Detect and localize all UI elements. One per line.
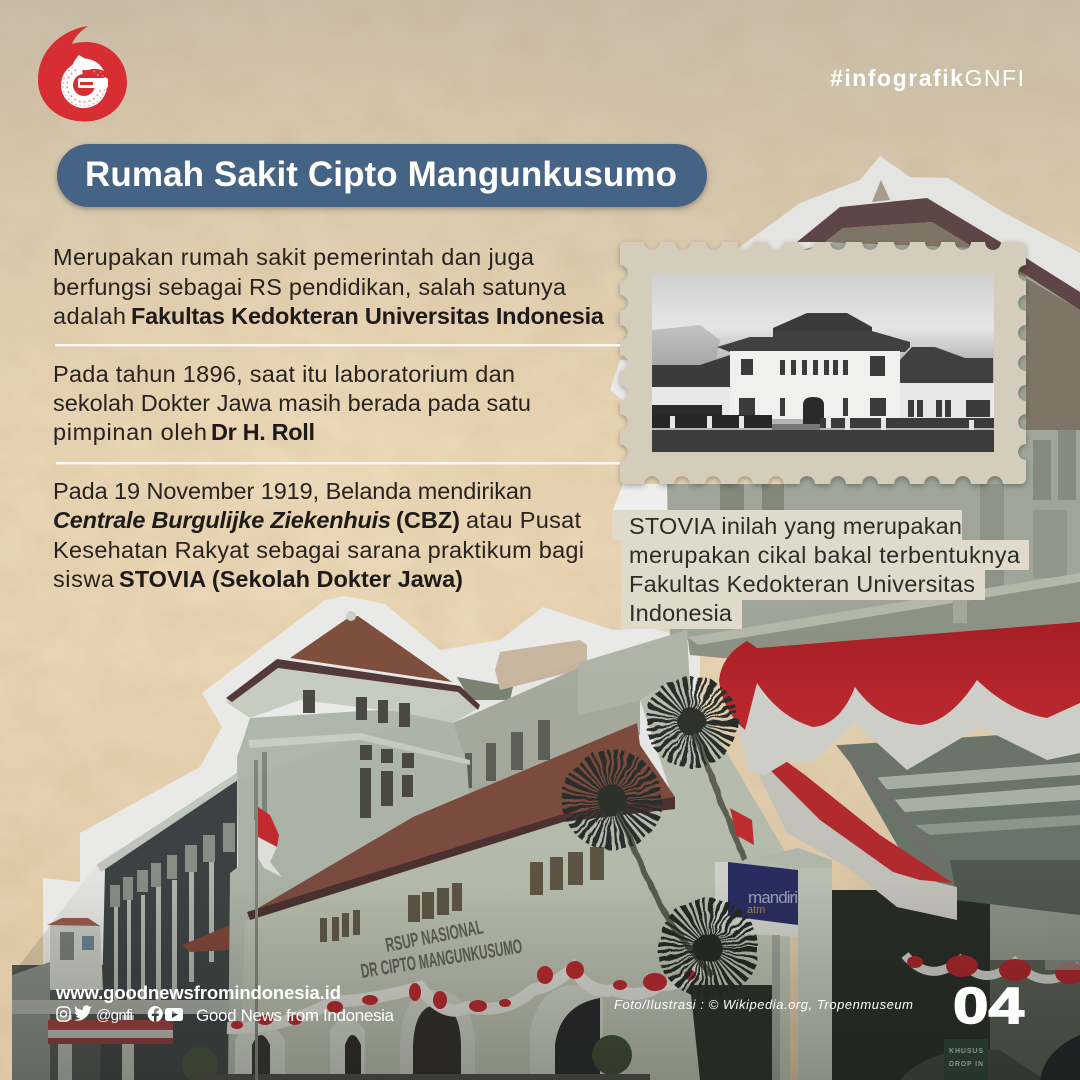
upper right building behind stamp — [667, 180, 1080, 640]
handle: @gnfi — [96, 1007, 133, 1024]
photo credit: Foto/Ilustrasi : © Wikipedia.org, Tropenmuseum — [614, 997, 913, 1012]
paragraph 2: Pada tahun 1896, saat itu laboratorium dan — [53, 361, 515, 387]
icon: instagram — [57, 1007, 70, 1021]
logo: red GNFI swirl — [38, 26, 127, 122]
title pill: Rumah Sakit Cipto Mangunkusumo — [85, 155, 677, 194]
paragraph 3: Pada 19 November 1919, Belanda mendirikan — [53, 478, 532, 504]
flag on pole — [255, 798, 282, 1080]
paragraph 3 — [53, 478, 584, 592]
icon: twitter — [74, 1005, 92, 1021]
caption with highlighted lines: Indonesia — [629, 600, 733, 626]
historic black and white photo — [652, 274, 994, 452]
bottom shading over photo — [12, 570, 1080, 1080]
palm tree centre — [587, 775, 712, 975]
paragraph 1: berfungsi sebagai RS pendidikan, salah satunya — [53, 274, 567, 300]
palm tree lower — [683, 923, 733, 973]
hashtag: #infografikGNFI — [830, 65, 1024, 91]
wing windows — [320, 847, 604, 942]
paragraph 2: sekolah Dokter Jawa masih berada pada satu — [53, 390, 531, 416]
drop-in sign — [944, 1039, 988, 1080]
top bunting, white swag — [735, 678, 1080, 775]
drop-in sign: DROP IN — [949, 1061, 983, 1068]
paragraph 3: Kesehatan Rakyat sebagai sarana praktikum bagi — [53, 537, 584, 563]
main wing tiled roof — [247, 723, 675, 920]
building sign: RSUP Nasional Dr Cipto Mangunkusumo — [359, 916, 524, 983]
paragraph 1: Fakultas Kedokteran Universitas Indonesia — [131, 303, 605, 329]
dark planting at base of palm — [592, 935, 780, 1080]
small red flag on palm — [730, 808, 754, 845]
ATM sign — [715, 862, 798, 937]
footer website: www.goodnewsfromindonesia.id — [55, 982, 341, 1003]
stamp paper — [620, 242, 1026, 484]
right garland — [905, 955, 1080, 984]
icon: facebook — [148, 1006, 163, 1022]
paragraph 3: atau Pusat — [466, 507, 581, 533]
torn white paper behind lower building — [43, 596, 700, 1080]
caption with highlighted lines — [612, 510, 1029, 629]
diagonal bunting, white — [745, 730, 957, 920]
left dark modern building — [12, 773, 238, 1080]
building sign: RSUP Nasional Dr Cipto Mangunkusumo: RSUP NASIONAL — [384, 916, 485, 957]
building sign: RSUP Nasional Dr Cipto Mangunkusumo: DR CIPTO MANGUNKUSUMO — [359, 936, 524, 983]
paragraph 3: STOVIA (Sekolah Dokter Jawa) — [119, 566, 463, 592]
page number: 04 — [953, 977, 1025, 1034]
ATM sign: mandiri — [748, 888, 798, 907]
channel name: Good News from Indonesia — [196, 1006, 395, 1025]
canopy underside with beams — [836, 730, 1080, 970]
torn white paper behind upper right building — [740, 156, 1080, 330]
canopy roof band — [688, 573, 1080, 660]
garland on main wall — [227, 961, 700, 1029]
paragraph 1: Merupakan rumah sakit pemerintah dan juga — [53, 244, 535, 270]
main wing wall — [240, 683, 790, 1080]
paragraph 3: siswa — [53, 566, 115, 592]
paragraph 2: pimpinan oleh — [53, 419, 207, 445]
paragraph 3: (CBZ) — [396, 507, 460, 533]
lower right wall and dark planting — [800, 890, 1080, 1080]
diagonal bunting, red — [768, 748, 953, 883]
small far white tower — [12, 918, 232, 1080]
social icons and handles — [57, 1005, 395, 1025]
arches at ground floor — [200, 985, 650, 1080]
drop-in sign: KHUSUS — [949, 1048, 983, 1055]
caption with highlighted lines: Fakultas Kedokteran Universitas — [629, 571, 975, 597]
stamp with historic photo — [620, 242, 1026, 484]
top bunting, red swag — [719, 622, 1080, 730]
torn white paper scrap beside stamp — [610, 360, 628, 405]
torn white paper scrap under stamp — [612, 484, 670, 512]
title pill — [57, 144, 707, 207]
paragraph 2: Dr H. Roll — [211, 419, 315, 445]
back wing with upper windows — [450, 630, 690, 830]
paragraph 3: Centrale Burgulijke Ziekenhuis — [53, 507, 391, 533]
icon: youtube — [165, 1008, 183, 1021]
palm tree upper — [669, 699, 745, 860]
ATM sign: atm — [747, 904, 765, 916]
paragraph 1 — [53, 244, 605, 329]
column — [757, 848, 832, 1080]
caption with highlighted lines: merupakan cikal bakal terbentuknya — [629, 542, 1021, 568]
tower — [226, 611, 480, 1080]
caption with highlighted lines: STOVIA inilah yang merupakan — [629, 513, 962, 539]
paragraph 1: adalah — [53, 303, 126, 329]
paragraph 2 — [53, 361, 531, 445]
